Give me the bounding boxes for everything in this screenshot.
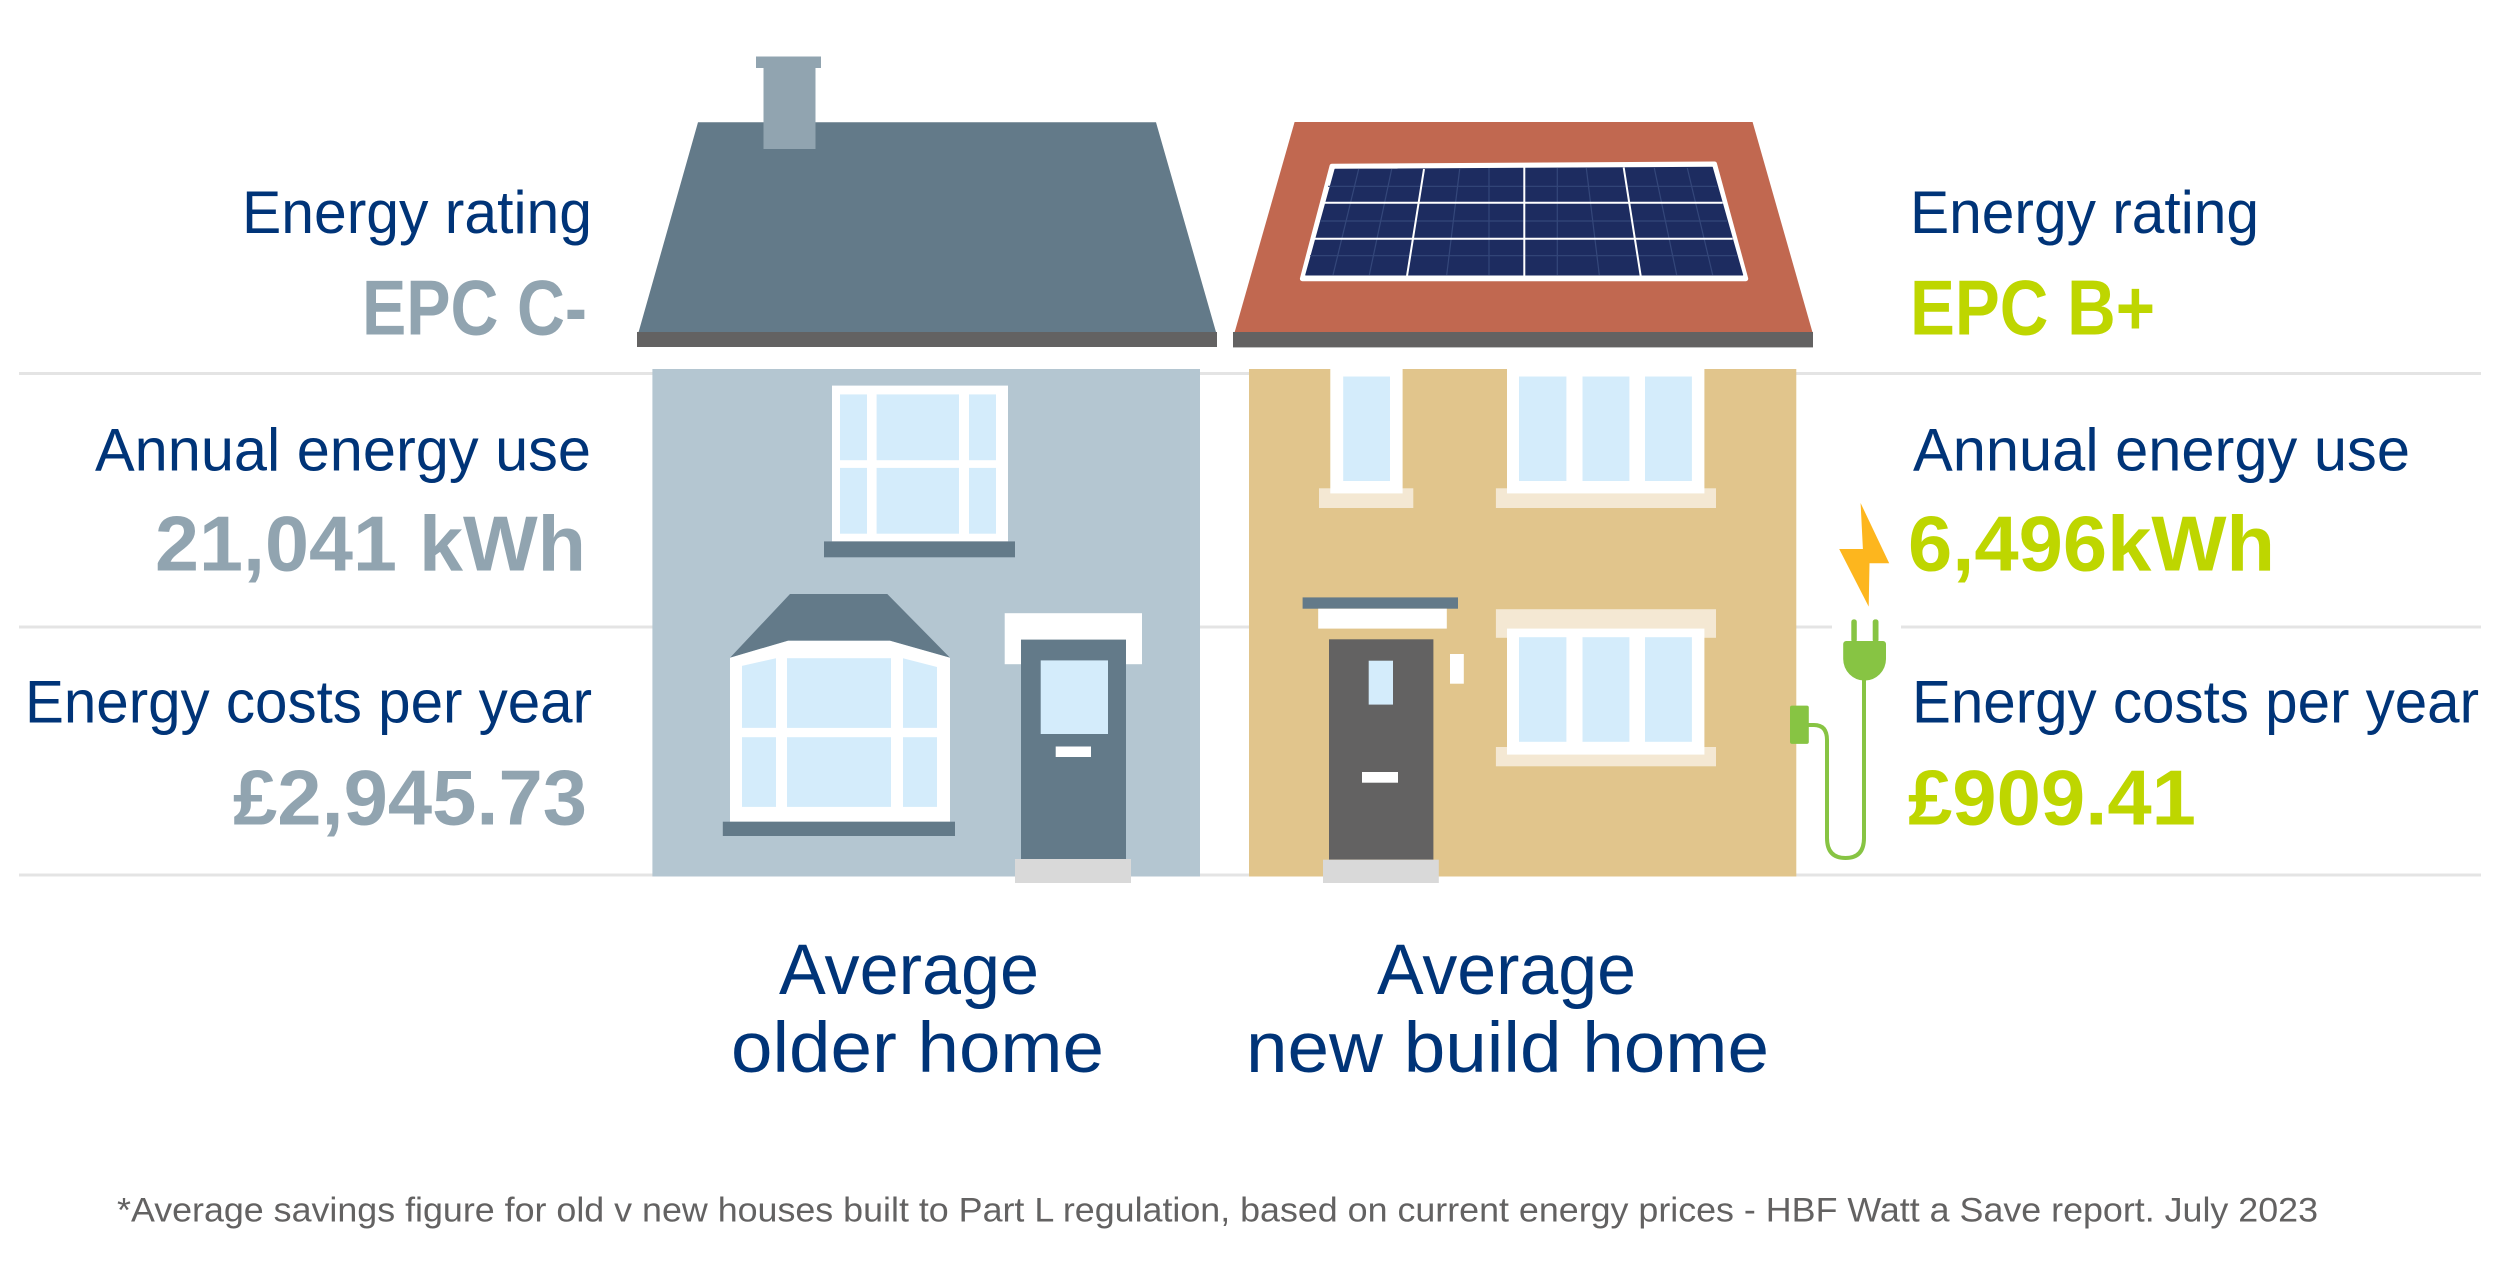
wall (652, 369, 1200, 876)
text: energy costs label, new build: Energy costs per year (1912, 668, 2479, 736)
front door with porch and step (1005, 613, 1142, 883)
upstairs window (824, 386, 1015, 557)
downstairs window (1496, 609, 1716, 766)
wall light (1450, 654, 1464, 684)
upstairs left window (1319, 369, 1413, 508)
roof: slate (639, 122, 1216, 332)
caption: average older home: Average (779, 931, 1039, 1010)
chimney (756, 56, 821, 149)
caption: average new build home: new build home (1246, 1009, 1769, 1088)
wall (1249, 369, 1796, 876)
footnote: *Average savings figure for old v new houses built to Part L regulation, based on current energy prices - HBF Watt a Save report. July 2023 (117, 1192, 2318, 1230)
panel: older home statistics (25, 179, 592, 842)
text: 6,496kWh value: 6,496kWh (1908, 500, 2275, 588)
illustration: older home (637, 56, 1217, 883)
icon: lightning bolt (1839, 503, 1889, 607)
text: EPC B+ value: EPC B+ (1910, 264, 2155, 352)
panel: new build home statistics (1908, 179, 2479, 842)
text: £909.41 value: £909.41 (1908, 754, 2196, 842)
caption: average older home: older home (731, 1009, 1104, 1088)
roof fascia (1233, 332, 1813, 347)
roof fascia (637, 332, 1217, 347)
text: annual energy use label, new build: Annual energy use (1913, 416, 2410, 484)
solar panels (1302, 164, 1746, 279)
caption: average new build home (1246, 931, 1769, 1088)
illustration: new build home (1233, 122, 1813, 883)
text: energy rating label, older home: Energy rating (242, 179, 592, 246)
caption: average new build home: Average (1377, 931, 1636, 1010)
upstairs right window (1496, 369, 1716, 508)
cable (1808, 678, 1864, 858)
bay window (723, 594, 955, 836)
text: 21,041 kWh value: 21,041 kWh (155, 500, 586, 588)
text: £2,945.73 value: £2,945.73 (233, 754, 587, 842)
text: annual energy use label, older home: Annual energy use (95, 416, 591, 484)
front door with canopy and step (1303, 597, 1458, 883)
roof: terracotta (1235, 122, 1812, 332)
plug (1843, 641, 1886, 681)
icon: plug and cable (1790, 619, 1886, 858)
text: energy costs label, older home: Energy costs per year (25, 668, 592, 736)
text: EPC C- value: EPC C- (362, 264, 587, 352)
caption: average older home (731, 931, 1104, 1088)
socket (1790, 706, 1809, 744)
text: energy rating label, new build: Energy rating (1910, 179, 2259, 246)
